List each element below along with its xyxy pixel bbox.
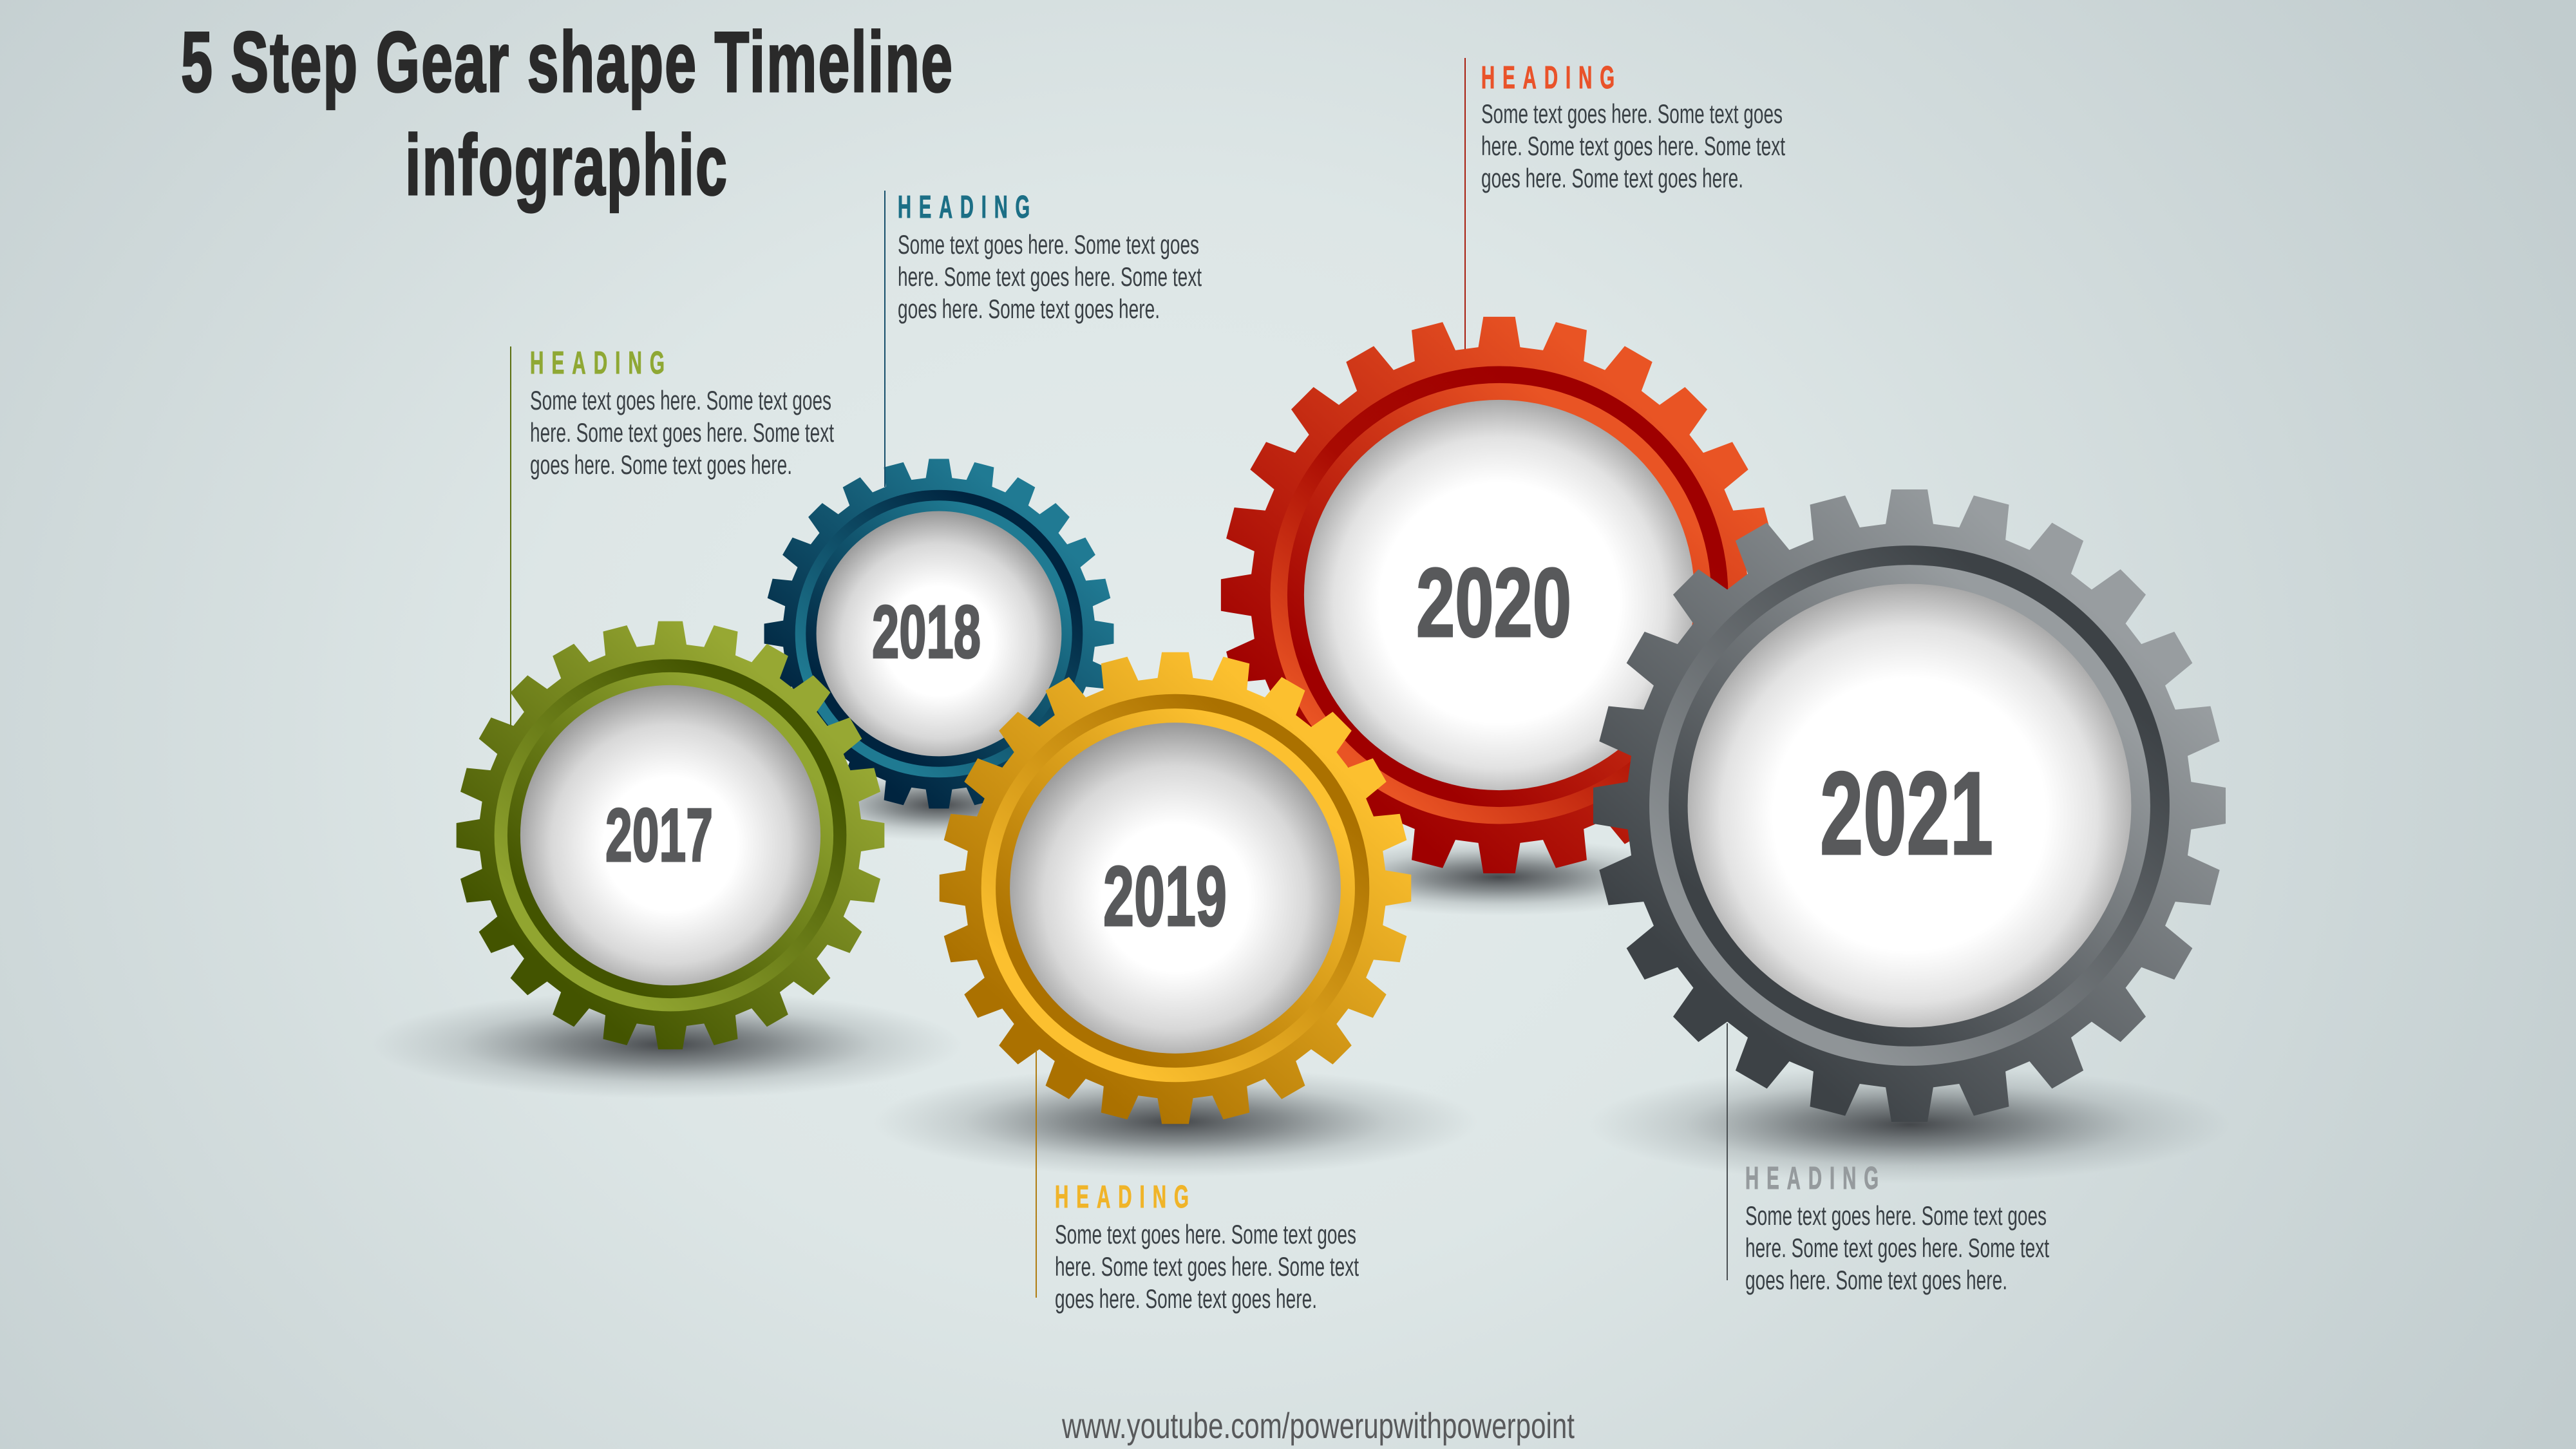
heading 2020: HEADING [1481,61,1622,95]
body text 2018: Some text goes here. Some text goes [898,229,1199,260]
heading 2017: HEADING [530,346,672,381]
body text 2018: here. Some text goes here. Some text [898,261,1202,292]
shadow: gear 2017 [370,990,963,1099]
gear teeth 2021 [1593,489,2226,1122]
body text 2017: goes here. Some text goes here. [530,450,792,480]
body text 2017: here. Some text goes here. Some text [530,417,834,448]
leader line 2020 [1464,58,1466,349]
panel: gear 2021 [1593,489,2226,1122]
body text 2018: goes here. Some text goes here. [898,294,1160,324]
body text 2021: Some text goes here. Some text goes [1745,1200,2047,1231]
callout: 2020 [1464,58,1785,349]
outer ring 2018 [795,490,1083,777]
shadow: gear 2019 [873,1066,1478,1177]
white disc 2020 [1304,400,1694,790]
body text 2019: goes here. Some text goes here. [1055,1283,1317,1314]
heading 2018: HEADING [898,190,1037,225]
callout: 2021 [1727,1023,2049,1295]
heading 2021: HEADING [1745,1161,1886,1196]
year 2021: 2021 [1820,747,1993,879]
shadow: gear 2020 [1300,838,1699,916]
outer ring 2019 [981,694,1369,1082]
gear teeth 2019 [940,652,1411,1124]
white disc 2021 [1688,584,2131,1027]
gear teeth 2018 [764,459,1113,808]
callout: 2017 [510,346,834,726]
inner ring 2017 [507,672,833,998]
year 2017: 2017 [605,793,713,877]
inner ring 2019 [996,708,1355,1068]
body text 2021: goes here. Some text goes here. [1745,1265,2007,1295]
panel: gear 2017 [457,621,884,1049]
outer ring 2017 [495,659,846,1011]
title [181,15,954,213]
callout: 2019 [1036,1050,1359,1314]
inner ring 2020 [1287,383,1711,807]
body text 2020: goes here. Some text goes here. [1481,163,1743,193]
body text 2019 [1055,1219,1359,1314]
body text 2020 [1481,99,1785,193]
outer ring 2020 [1271,366,1728,824]
outer ring 2021 [1649,545,2170,1066]
panel: gear 2020 [1221,317,1777,873]
year 2018: 2018 [872,590,981,674]
gear teeth 2017 [457,621,884,1049]
body text 2019: Some text goes here. Some text goes [1055,1219,1356,1249]
body text 2018 [898,229,1202,324]
title: 5 Step Gear shape Timeline [181,15,954,110]
year 2020: 2020 [1416,548,1571,658]
footer url: www.youtube.com/powerupwithpowerpoint [1061,1405,1575,1446]
body text 2020: here. Some text goes here. Some text [1481,131,1785,161]
leader line 2021 [1727,1023,1728,1280]
body text 2017: Some text goes here. Some text goes [530,385,831,415]
callout: 2018 [884,190,1202,487]
inner ring 2018 [806,500,1072,767]
body text 2021: here. Some text goes here. Some text [1745,1233,2049,1263]
leader line 2017 [510,346,511,726]
shadow: gear 2021 [1587,1065,2231,1184]
year 2019: 2019 [1103,849,1227,943]
leader line 2019 [1036,1050,1037,1298]
heading 2019: HEADING [1055,1180,1197,1215]
body text 2017 [530,385,834,480]
body text 2019: here. Some text goes here. Some text [1055,1251,1359,1282]
leader line 2018 [884,191,886,487]
body text 2020: Some text goes here. Some text goes [1481,99,1783,129]
body text 2021 [1745,1200,2049,1295]
gear teeth 2020 [1221,317,1777,873]
white disc 2018 [817,511,1061,756]
shadow: gear 2018 [797,769,1081,841]
white disc 2017 [520,685,820,985]
panel: gear 2018 [764,459,1113,808]
white disc 2019 [1010,723,1341,1054]
inner ring 2021 [1669,565,2150,1046]
panel: gear 2019 [940,652,1411,1124]
title: infographic [405,118,728,213]
